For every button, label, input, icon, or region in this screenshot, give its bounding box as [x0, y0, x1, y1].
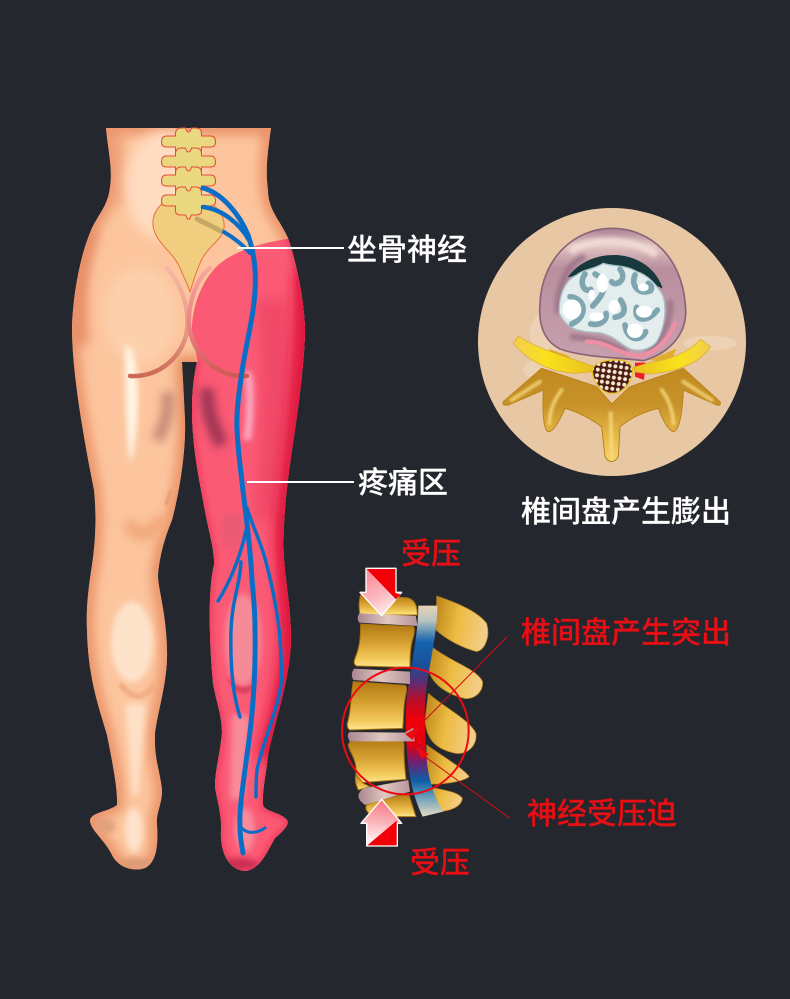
pain area: red zone on the right leg	[192, 238, 305, 871]
callout leader: disc protrusion	[405, 637, 507, 740]
pink herniation streak	[587, 323, 675, 356]
callout circle	[342, 668, 469, 794]
buttock crease: right	[189, 268, 247, 376]
label: nerve compressed: 神经受压迫	[527, 798, 677, 831]
label line: sciatic nerve	[237, 247, 344, 249]
annulus inner shadow	[557, 257, 670, 353]
sacrum shadow band	[197, 219, 221, 231]
annulus top highlight	[570, 241, 657, 255]
spine side view diagram	[342, 568, 510, 846]
buttock crease: left	[130, 268, 188, 376]
vertebral arch bone	[503, 368, 720, 462]
sciatic nerve	[203, 188, 281, 853]
circle backdrop	[478, 208, 746, 476]
nucleus	[559, 263, 665, 350]
skin silhouette	[72, 128, 305, 871]
skin shading	[72, 128, 305, 871]
label: pressure bottom: 受压	[410, 847, 470, 880]
spinous processes	[423, 596, 488, 812]
caption: disc bulge: 椎间盘产生膨出	[521, 496, 731, 529]
dark inner arc	[568, 255, 663, 288]
vertebral bodies	[347, 595, 417, 817]
label: sciatic nerve: 坐骨神经	[347, 234, 467, 267]
bone highlights	[512, 382, 712, 457]
nucleus folds	[570, 269, 657, 339]
label: pain area: 疼痛区	[358, 467, 448, 500]
vertebral discs	[348, 613, 417, 805]
lumbar vertebrae	[162, 128, 216, 219]
label: disc protrusion: 椎间盘产生突出	[521, 617, 731, 650]
sacrum	[153, 203, 224, 292]
red nerve compression	[635, 363, 646, 380]
panel: bulging disc circle	[478, 208, 746, 476]
disc annulus	[540, 228, 686, 361]
nucleus highlights	[563, 274, 652, 338]
gold bone behind disc	[548, 348, 677, 363]
spinal canal gradient: nerve compressed	[406, 606, 443, 817]
spinal cord	[592, 360, 633, 393]
callout leader: nerve compressed	[416, 747, 510, 818]
body: back view with pain area	[72, 128, 320, 890]
label: pressure top: 受压	[401, 538, 461, 571]
label line: pain area	[247, 481, 354, 483]
watermark	[523, 310, 737, 380]
bottom pressure arrow	[361, 799, 402, 846]
yellow nerve wings	[513, 336, 594, 373]
top pressure arrow	[360, 568, 402, 616]
